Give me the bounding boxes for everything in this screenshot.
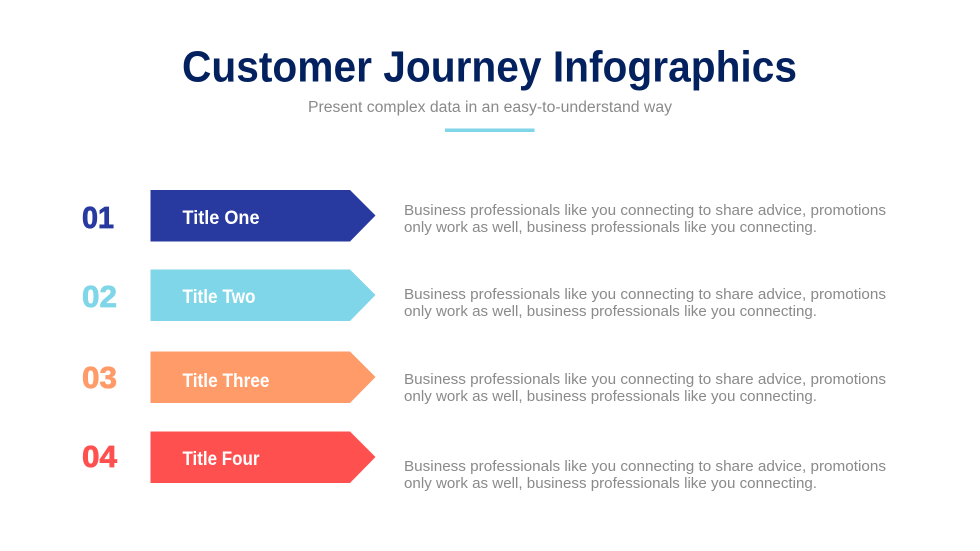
- subtitle: Present complex data in an easy-to-understand way: [308, 99, 672, 116]
- number 04: 04: [82, 439, 118, 474]
- title: Customer Journey Infographics: [182, 42, 797, 92]
- arrow: Title Three: [150, 352, 376, 403]
- number 02: 02: [82, 279, 117, 314]
- description 3: Business professionals like you connecting to share advice, promotions: [404, 372, 886, 388]
- description 2: only work as well, business professionals like you connecting.: [404, 304, 817, 320]
- description 1: Business professionals like you connecting to share advice, promotions: [404, 203, 886, 219]
- title underline accent: [445, 128, 534, 132]
- number 03: 03: [82, 360, 117, 395]
- label: Title Three: Title Three: [182, 371, 270, 392]
- row 4: [82, 432, 886, 492]
- arrow: Title Four: [150, 432, 376, 483]
- label: Title One: Title One: [182, 208, 260, 229]
- row 1: [82, 190, 886, 242]
- arrow: Title One: [150, 190, 376, 242]
- row 3: [82, 352, 886, 405]
- arrow: Title Two: [150, 270, 376, 321]
- description 1: only work as well, business professionals like you connecting.: [404, 220, 817, 236]
- description 2: Business professionals like you connecting to share advice, promotions: [404, 287, 886, 303]
- description 4: only work as well, business professionals like you connecting.: [404, 476, 817, 492]
- description 3: only work as well, business professionals like you connecting.: [404, 389, 817, 405]
- row 2: [82, 270, 886, 321]
- label: Title Two: Title Two: [182, 287, 256, 308]
- label: Title Four: Title Four: [182, 449, 260, 470]
- number 01: 01: [82, 200, 114, 235]
- description 4: Business professionals like you connecting to share advice, promotions: [404, 459, 886, 475]
